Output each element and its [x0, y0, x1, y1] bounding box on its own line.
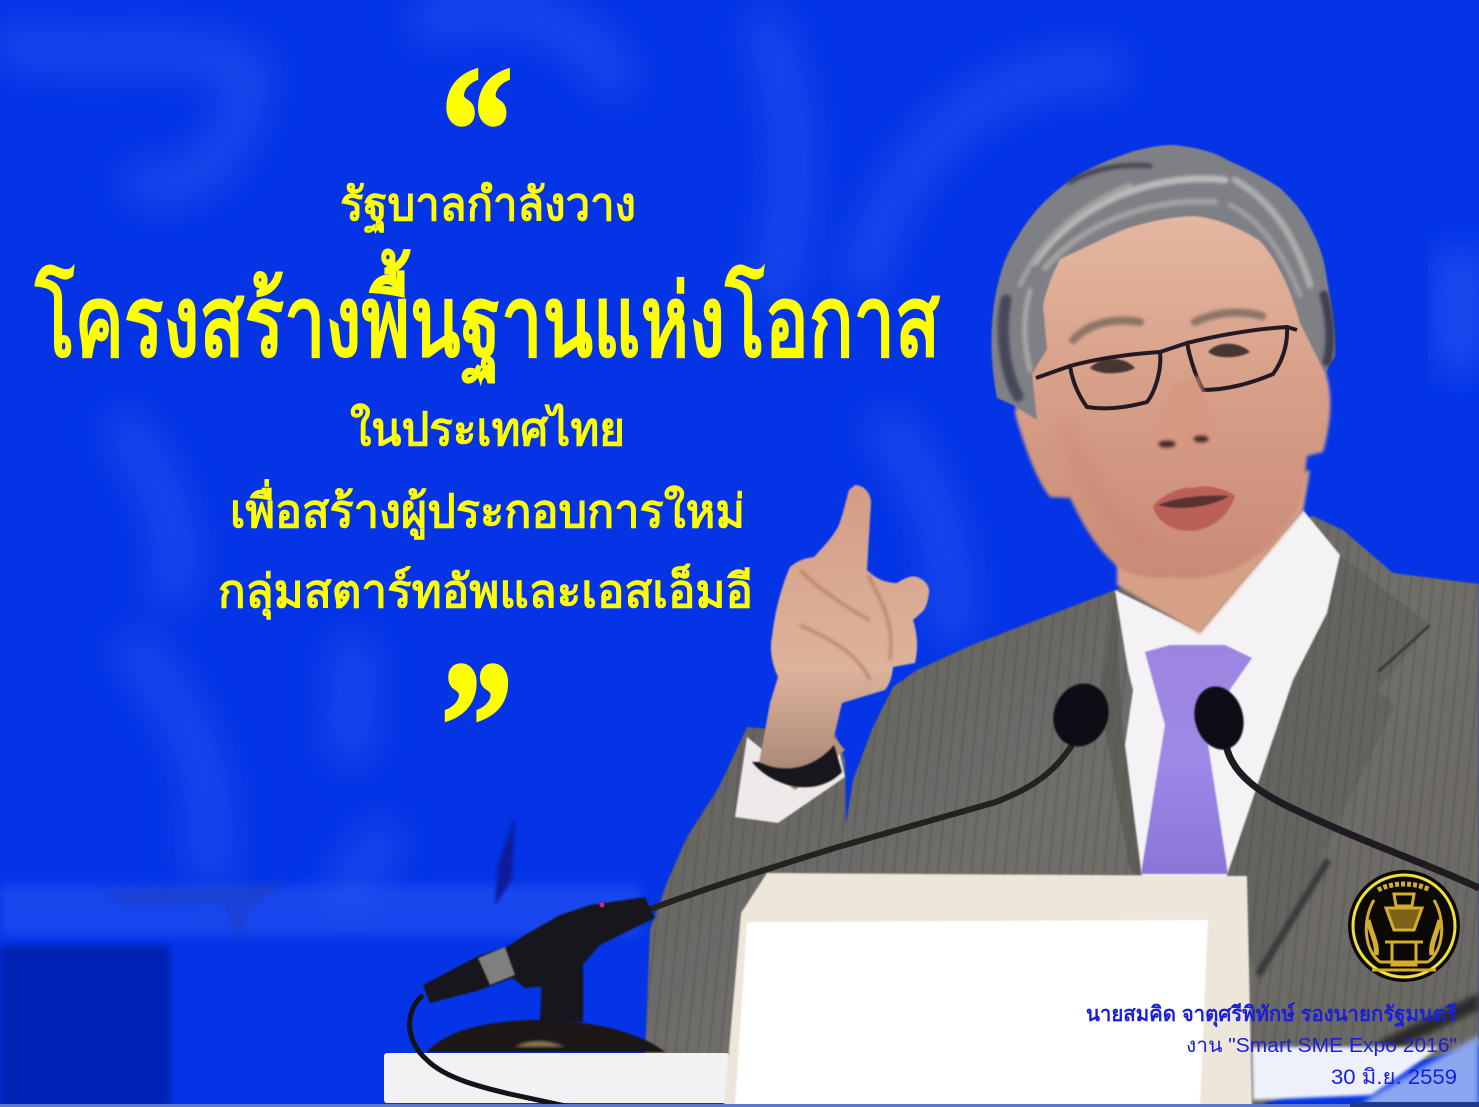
- necktie: [1141, 645, 1252, 874]
- glasses: [1036, 327, 1297, 408]
- shirt collar: [1115, 510, 1340, 878]
- connector: [478, 947, 515, 985]
- indicator light: [600, 902, 604, 908]
- speaker photo: [645, 145, 1479, 1107]
- face and ears: [1015, 190, 1330, 578]
- microphone base: [427, 1020, 665, 1052]
- quote text block: [34, 178, 940, 620]
- left microphone head: [1045, 676, 1117, 754]
- microphone stand: [540, 965, 583, 1022]
- suit jacket: [645, 516, 1479, 1107]
- cheek shading: [1060, 420, 1175, 547]
- eyes: [1090, 344, 1250, 373]
- podium front: [735, 920, 1208, 1107]
- nose: [1154, 375, 1218, 451]
- left lapel: [1100, 590, 1142, 878]
- headline: โครงสร้างพื้นฐานแห่งโอกาส: [34, 248, 940, 387]
- shirt cuff: [735, 737, 845, 823]
- quote line 1: รัฐบาลกำลังวาง: [340, 178, 636, 234]
- right microphone stem: [1226, 745, 1479, 888]
- microphones: [423, 676, 1479, 1052]
- hair highlights: [1003, 165, 1330, 396]
- date: 30 มิ.ย. 2559: [1331, 1066, 1457, 1089]
- eyebrows: [1073, 313, 1262, 340]
- icon: government seal: [1348, 870, 1460, 982]
- podium: [0, 873, 1479, 1107]
- finger creases: [800, 570, 891, 680]
- pointing hand: [759, 485, 929, 790]
- wristwatch: [752, 745, 842, 787]
- closing quotation mark: ”: [441, 626, 513, 825]
- podium base: [384, 1053, 729, 1103]
- right lapel: [1226, 555, 1430, 985]
- cable: [410, 995, 570, 1107]
- left microphone stem: [640, 745, 1072, 913]
- mouth: [1153, 486, 1235, 531]
- event name: งาน "Smart SME Expo 2016": [1186, 1035, 1457, 1057]
- microphone body: [423, 897, 655, 1003]
- quote line 4: เพื่อสร้างผู้ประกอบการใหม่: [230, 479, 745, 540]
- opening quotation mark: “: [441, 31, 513, 230]
- podium top and frame: [724, 873, 1252, 1107]
- speaker name: นายสมคิด จาตุศรีพิทักษ์ รองนายกรัฐมนตรี: [1086, 1002, 1458, 1028]
- hair: [991, 145, 1335, 420]
- caption block: [1086, 1002, 1458, 1089]
- quote line 5: กลุ่มสตาร์ทอัพและเอสเอ็มอี: [218, 563, 753, 620]
- right microphone head: [1188, 681, 1250, 755]
- right podium ledge: [1252, 1047, 1440, 1100]
- neck: [1117, 470, 1310, 634]
- quote line 3: ในประเทศไทย: [350, 402, 625, 455]
